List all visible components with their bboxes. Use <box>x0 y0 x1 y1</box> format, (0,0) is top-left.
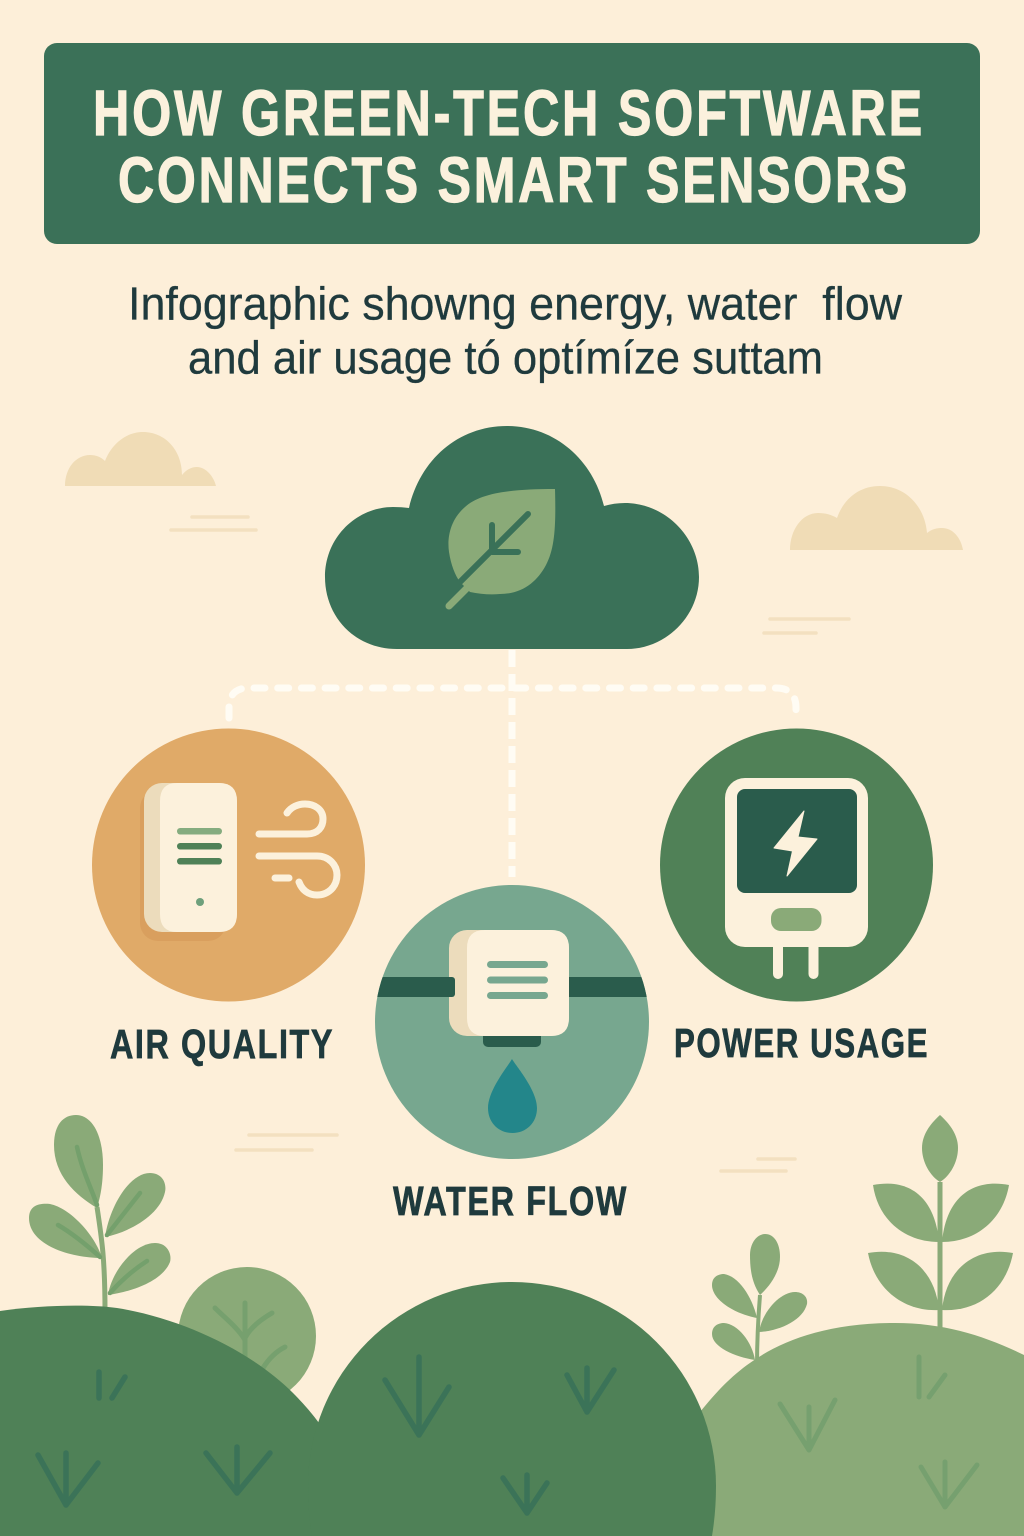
plant: round shrub <box>179 1267 316 1390</box>
hill: dark center <box>308 1282 716 1536</box>
meter button <box>771 908 822 931</box>
subtitle <box>128 278 903 384</box>
device body <box>140 783 237 941</box>
subtitle: Infographic showng energy, water flow <box>128 278 903 330</box>
title text <box>93 77 925 216</box>
sensor: power usage <box>660 728 933 1002</box>
plant: small right sprig <box>712 1234 807 1366</box>
plant: left sprig <box>29 1115 170 1312</box>
title banner <box>44 43 980 244</box>
cloud hub icon <box>325 426 699 649</box>
hill: light right <box>690 1323 1024 1536</box>
sensor: water flow <box>370 885 655 1159</box>
device body <box>449 930 569 1047</box>
dashed connectors <box>229 650 796 877</box>
subtitle: and air usage tó optímíze suttam <box>188 332 823 384</box>
icon: lightning bolt <box>774 811 817 876</box>
sensor: air quality <box>92 728 365 1002</box>
label: power usage: POWER USAGE <box>674 1020 929 1066</box>
background cloud: right <box>790 486 963 550</box>
wind streaks <box>171 517 849 1171</box>
label: water flow: WATER FLOW <box>393 1178 628 1224</box>
label: air quality: AIR QUALITY <box>110 1021 334 1067</box>
meter prongs <box>778 945 814 974</box>
icon: leaf <box>448 489 555 606</box>
pipe <box>370 977 655 997</box>
hill: dark left <box>0 1306 360 1536</box>
meter body <box>725 778 868 947</box>
icon: water drop <box>488 1059 537 1133</box>
meter screen <box>737 789 857 893</box>
icon: wind <box>259 804 337 895</box>
plant: large right sprig <box>868 1115 1013 1330</box>
background cloud: left <box>65 432 216 486</box>
